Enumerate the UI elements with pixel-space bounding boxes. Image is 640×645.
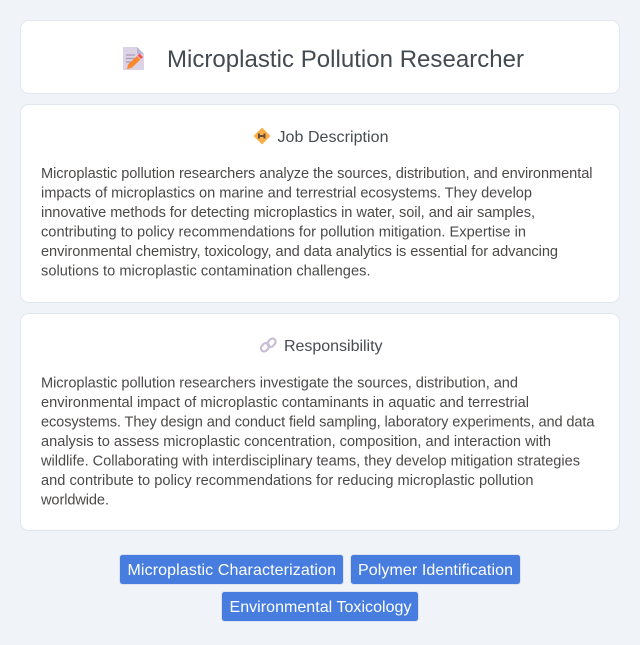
heading: job description: Job Description <box>278 129 388 146</box>
text block: responsibility: ecosystems. They design and conduct field sampling, laboratory experiments, and data <box>41 414 595 430</box>
panel: title <box>20 20 620 94</box>
tag: environmental toxicology <box>222 592 418 622</box>
text block: responsibility: environmental impact of microplastic contaminants in aquatic and terrestrial <box>41 395 529 411</box>
text block: job description: Microplastic pollution researchers analyze the sources, distribution, and environmental <box>41 166 592 182</box>
tag: microplastic characterization: Microplastic Characterization <box>128 562 336 579</box>
icon: chain link <box>260 337 277 353</box>
text block: job description: innovative methods for detecting microplastics in water, soil, and air samples, <box>41 205 535 221</box>
text block: responsibility: and contribute to policy recommendations for reducing microplastic pollution <box>41 473 534 489</box>
heading: title: Microplastic Pollution Researcher <box>167 46 524 73</box>
text block: responsibility: worldwide. <box>40 492 109 508</box>
text block: job description: contributing to policy recommendations for pollution mitigation. Expertise in <box>41 224 526 240</box>
icon: document with pencil <box>123 47 144 70</box>
text block: responsibility: analysis to assess microplastic concentration, composition, and interaction with <box>41 434 551 450</box>
icon: diamond sign <box>254 128 270 144</box>
text block: responsibility <box>40 376 595 508</box>
text block: job description: impacts of microplastics on marine and terrestrial ecosystems. They develop <box>41 186 532 202</box>
tag: microplastic characterization <box>120 554 344 584</box>
heading: responsibility: Responsibility <box>284 338 382 355</box>
panel: job description <box>20 104 620 302</box>
text block: job description: solutions to microplastic contamination challenges. <box>41 264 370 280</box>
text block: responsibility: Microplastic pollution researchers investigate the sources, distribution, and <box>41 376 518 392</box>
text block: job description: environmental chemistry, toxicology, and data analytics is essential for advancing <box>41 244 558 260</box>
tag: polymer identification <box>350 554 520 584</box>
text block: responsibility: wildlife. Collaborating with interdisciplinary teams, they develop mitigation strategies <box>40 454 580 470</box>
panel: responsibility <box>20 314 620 530</box>
text block: job description <box>41 166 592 280</box>
tag: polymer identification: Polymer Identification <box>358 562 513 579</box>
tag: environmental toxicology: Environmental Toxicology <box>230 599 412 616</box>
